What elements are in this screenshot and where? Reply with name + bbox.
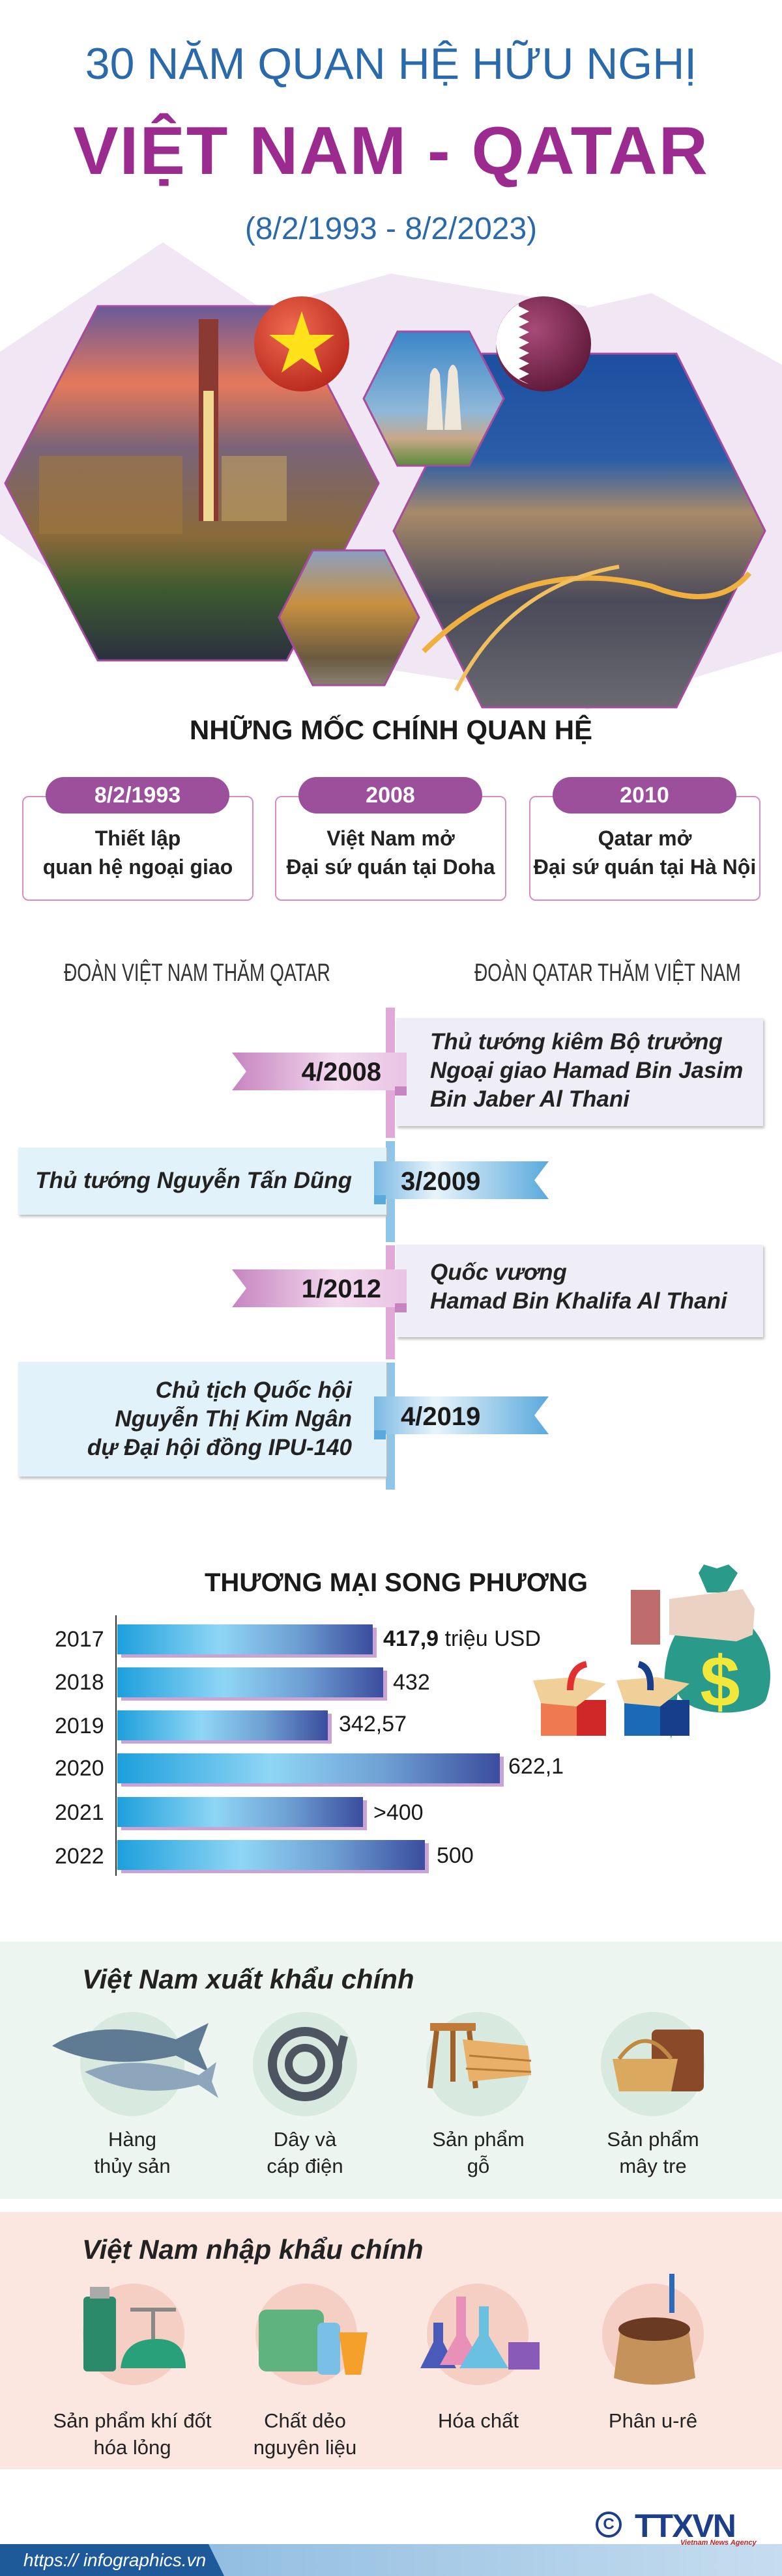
text: 4/2008 visitor [430,1029,743,1112]
text: 1/2012 visitor: Quốc vương [430,1260,567,1285]
milestone 1: 8/2/1993 [94,783,181,808]
label: urea: Phân u-rê [609,2409,697,2432]
milestone 3: Đại sứ quán tại Hà Nội [534,855,756,879]
heading: exports: Việt Nam xuất khẩu chính [82,1964,414,1994]
milestone 3: Qatar mở [598,827,691,850]
icon: urea [602,2274,704,2385]
text: 1/2012 visitor [430,1260,727,1314]
label: seafood: Hàng [108,2128,156,2151]
entry 1/2012 [232,1245,763,1337]
text: 4/2008 visitor: Thủ tướng kiêm Bộ trưởng [430,1029,723,1054]
footer bar [0,2544,782,2576]
bar chart: 2019 [55,1714,104,1738]
column header left: ĐOÀN VIỆT NAM THĂM QATAR [64,959,330,987]
panel: imports [0,2212,782,2469]
milestone 1: Thiết lập [95,827,181,850]
milestone 2: Đại sứ quán tại Doha [286,855,495,879]
label: gas: Sản phẩm khí đốt [53,2409,211,2432]
label: rattan [607,2128,699,2177]
photo: Doha city [394,354,765,707]
subtitle: Việt Nam - Qatar: VIỆT NAM - QATAR [73,113,709,189]
icon: money bag and boxes: $ [700,1642,740,1722]
entry 3/2009 [18,1148,549,1215]
flag: Qatar [496,296,591,391]
label: wood: gỗ [467,2155,489,2177]
icon: seafood [52,2012,218,2116]
text: 3/2009 visitor: Thủ tướng Nguyễn Tấn Dũng [35,1168,352,1193]
photo: Hoi An [279,550,419,685]
title: 30 NĂM QUAN HỆ HỮU NGHỊ [85,39,697,89]
bar chart: 622,1 [508,1754,564,1779]
label: wood [432,2128,525,2177]
heading: milestones: NHỮNG MỐC CHÍNH QUAN HỆ [190,715,592,745]
bar chart: 2022 [55,1844,104,1869]
label: seafood: thủy sản [94,2155,171,2177]
label: gas: hóa lỏng [94,2436,171,2459]
bar chart: 500 [437,1843,474,1868]
text: 4/2008 visitor: Ngoại giao Hamad Bin Jasim [430,1058,743,1083]
bar chart: 2021 [55,1800,104,1825]
logo: TTXVN: C [603,2515,615,2533]
bar chart: >400 [373,1800,424,1825]
milestone 2: 2008 [366,783,415,808]
label: wood: Sản phẩm [432,2128,525,2151]
photo: pigeon towers [364,332,504,466]
footer url [0,2544,224,2576]
milestone 2 [275,777,506,901]
entry 4/2008 [232,1018,763,1126]
label: cables: cáp điện [267,2155,343,2177]
logo: TTXVN: TTXVN [635,2508,735,2544]
text: 4/2019 visitor: Chủ tịch Quốc hội [156,1378,352,1403]
heading: trade: THƯƠNG MẠI SONG PHƯƠNG [205,1568,588,1597]
bar chart: 2020 [55,1756,104,1781]
flag: Vietnam [254,296,349,391]
entry 4/2019 [18,1362,549,1477]
label: rattan: mây tre [619,2155,687,2177]
label: plastics: Chất dẻo [264,2409,346,2432]
milestone 1: quan hệ ngoại giao [43,855,233,879]
label: plastics [253,2409,356,2459]
bar chart: 417,9 triệu USD [383,1626,541,1651]
bar chart [55,1615,564,1876]
icon: rattan [601,2012,705,2116]
bar chart: 342,57 [339,1712,407,1736]
icon: plastics [255,2284,368,2385]
bar chart: 432 [393,1670,430,1695]
logo: TTXVN [596,2508,757,2547]
icon: wood [426,2012,532,2116]
date range: (8/2/1993 - 8/2/2023) [245,212,537,246]
logo: TTXVN: Vietnam News Agency [680,2539,757,2547]
label: cables: Dây và [274,2128,336,2151]
panel: exports [0,1942,782,2199]
axis [386,1008,395,1490]
photo hexagons [0,242,782,710]
entry 4/2008: 4/2008 [302,1058,381,1086]
label: cables [267,2128,343,2177]
text: 4/2019 visitor: dự Đại hội đồng IPU-140 [87,1435,352,1460]
icon: chemicals [420,2284,540,2385]
bar chart: 2018 [55,1670,104,1695]
text: 4/2008 visitor: Bin Jaber Al Thani [430,1086,630,1112]
entry 4/2019: 4/2019 [401,1402,480,1431]
footer url: https:// infographics.vn [23,2550,206,2570]
label: chemicals: Hóa chất [438,2409,519,2432]
label: plastics: nguyên liệu [253,2436,356,2459]
icon: cables [253,2012,357,2116]
label: seafood [94,2128,171,2177]
label: rattan: Sản phẩm [607,2128,699,2151]
milestone 3: 2010 [620,783,669,808]
text: 1/2012 visitor: Hamad Bin Khalifa Al Thani [430,1288,727,1314]
bar chart: 2017 [55,1627,104,1652]
icon: money bag and boxes [533,1564,770,1739]
background hexagons [0,242,782,710]
milestone 2: Việt Nam mở [326,827,455,850]
photo: Ho Chi Minh city [5,306,379,660]
entry 1/2012: 1/2012 [302,1275,381,1303]
entry 3/2009: 3/2009 [401,1167,480,1196]
label: gas [53,2409,211,2459]
milestone 3 [529,777,760,901]
text: 4/2019 visitor [87,1378,353,1460]
text: 4/2019 visitor: Nguyễn Thị Kim Ngân [115,1406,352,1432]
heading: imports: Việt Nam nhập khẩu chính [82,2234,424,2265]
milestone 1 [22,777,253,901]
column header right: ĐOÀN QATAR THĂM VIỆT NAM [474,959,741,987]
icon: gas [83,2284,186,2385]
timeline [18,1008,766,1490]
